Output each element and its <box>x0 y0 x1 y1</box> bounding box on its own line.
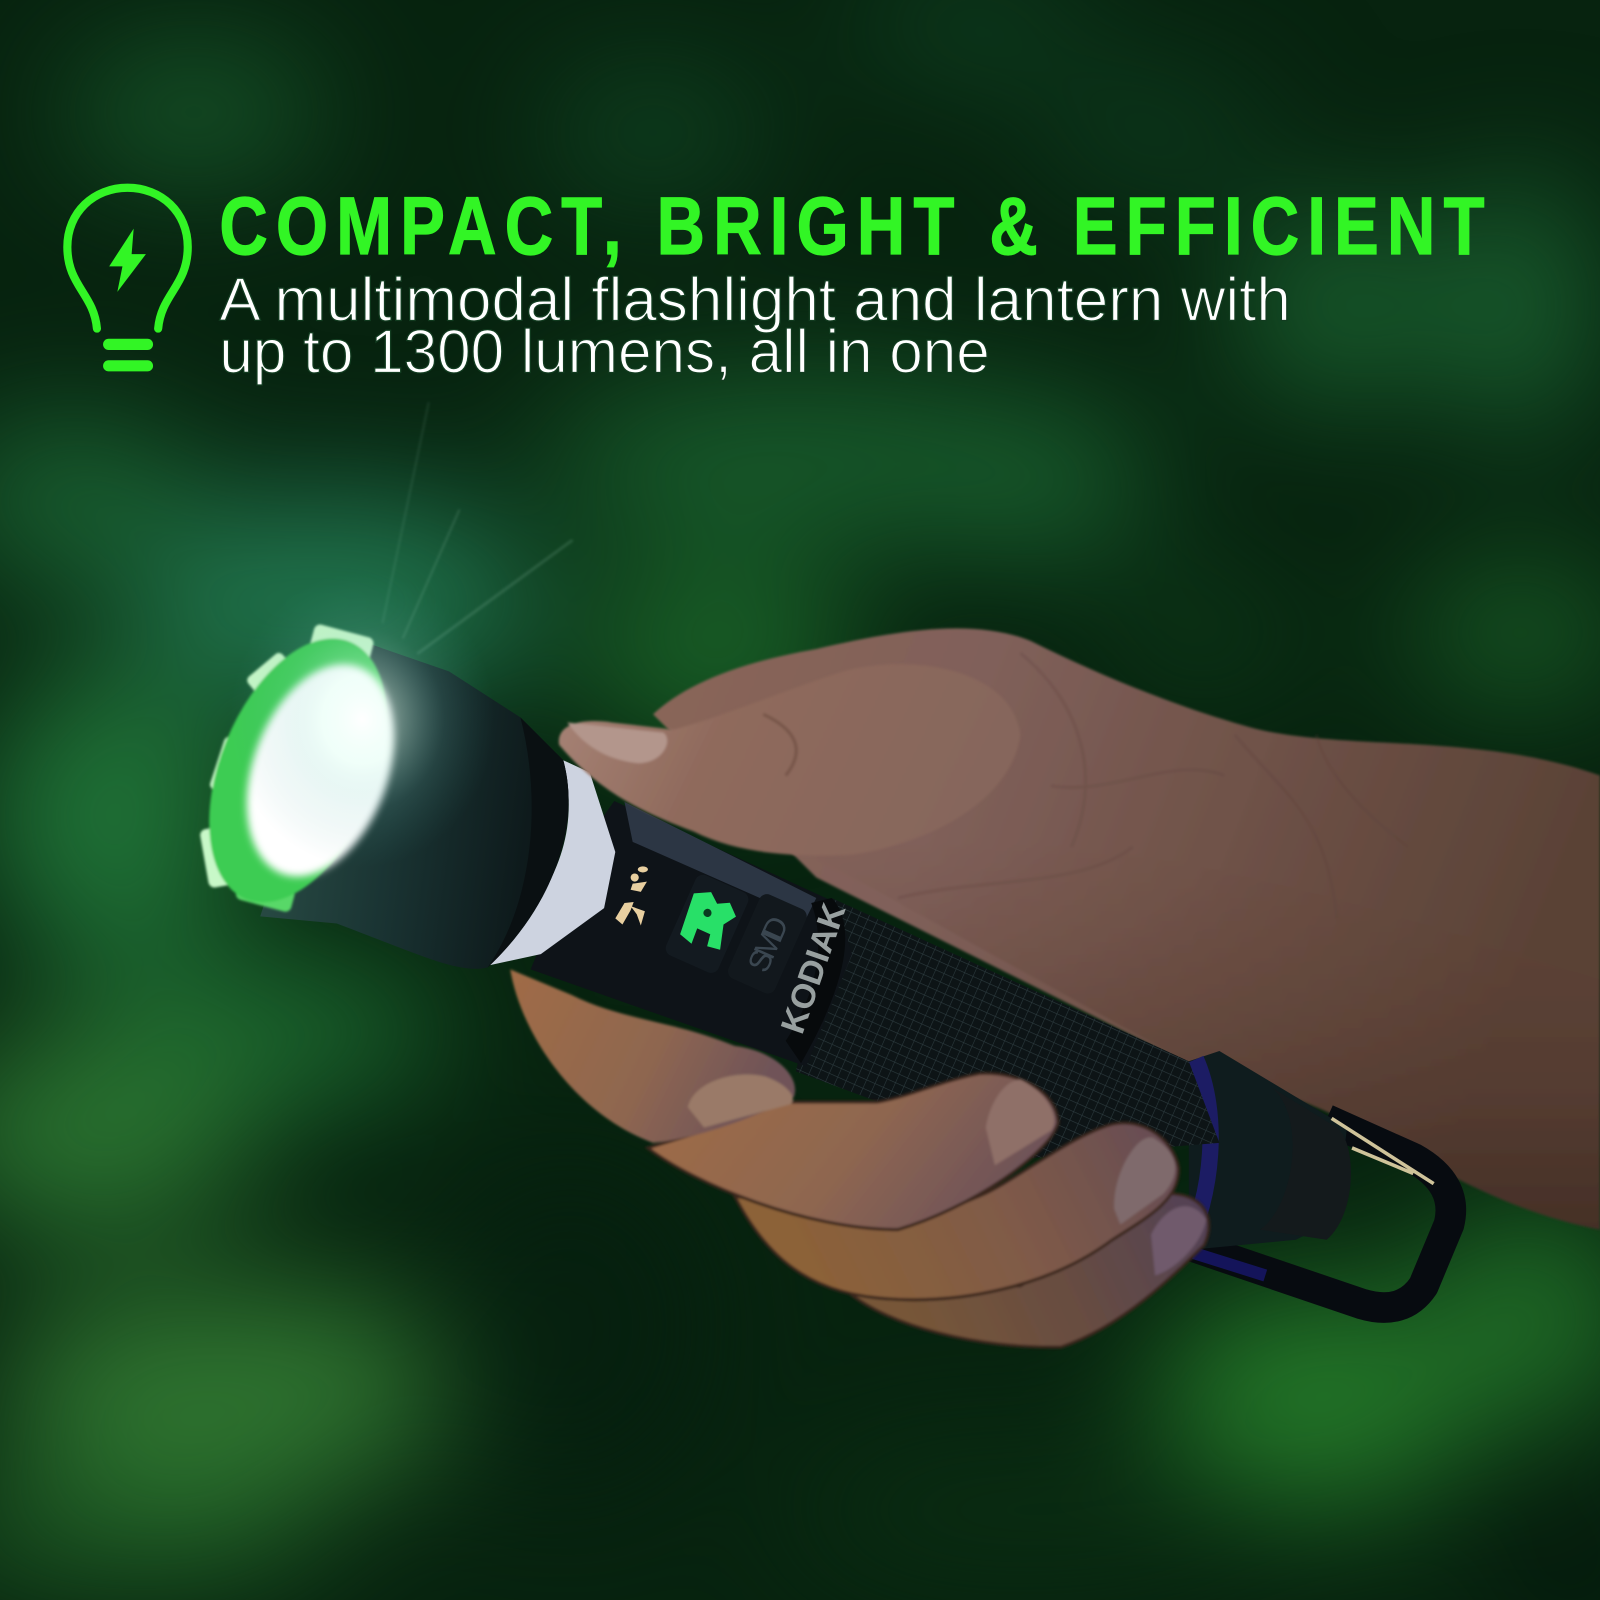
title: COMPACT, BRIGHT & EFFICIENT <box>219 180 1485 272</box>
subtitle: A multimodal flashlight and lantern with <box>219 265 1291 333</box>
control section body <box>531 801 852 1066</box>
subtitle <box>219 265 1291 385</box>
button: SMD <box>725 892 809 996</box>
carabiner wire <box>1332 1118 1434 1184</box>
third finger <box>735 1123 1179 1300</box>
subtitle: up to 1300 lumens, all in one <box>219 317 990 385</box>
hand and forearm <box>653 628 1600 1230</box>
lightbulb icon <box>67 188 188 371</box>
button: power <box>663 872 751 976</box>
knurled handle <box>796 898 1219 1158</box>
flashlight <box>174 613 1451 1308</box>
lens glow <box>230 571 495 867</box>
thumbnail <box>567 722 667 763</box>
thumb <box>559 664 1020 856</box>
lower fingers <box>510 969 1209 1347</box>
lantern diffuser band <box>480 760 615 967</box>
fourth finger <box>847 1193 1209 1347</box>
second finger <box>648 1073 1058 1230</box>
button: SMD: SMD <box>741 911 796 977</box>
knurled ring <box>488 717 569 967</box>
logo text: KODIAK <box>775 899 853 1038</box>
green bezel <box>174 613 422 928</box>
light beam rays <box>383 403 571 653</box>
KODIAK collar <box>786 898 845 1063</box>
battery display <box>615 866 648 926</box>
lit lens <box>219 644 421 897</box>
index finger <box>510 969 795 1143</box>
end cap and carabiner <box>1184 1051 1451 1308</box>
flashlight head <box>260 638 569 969</box>
